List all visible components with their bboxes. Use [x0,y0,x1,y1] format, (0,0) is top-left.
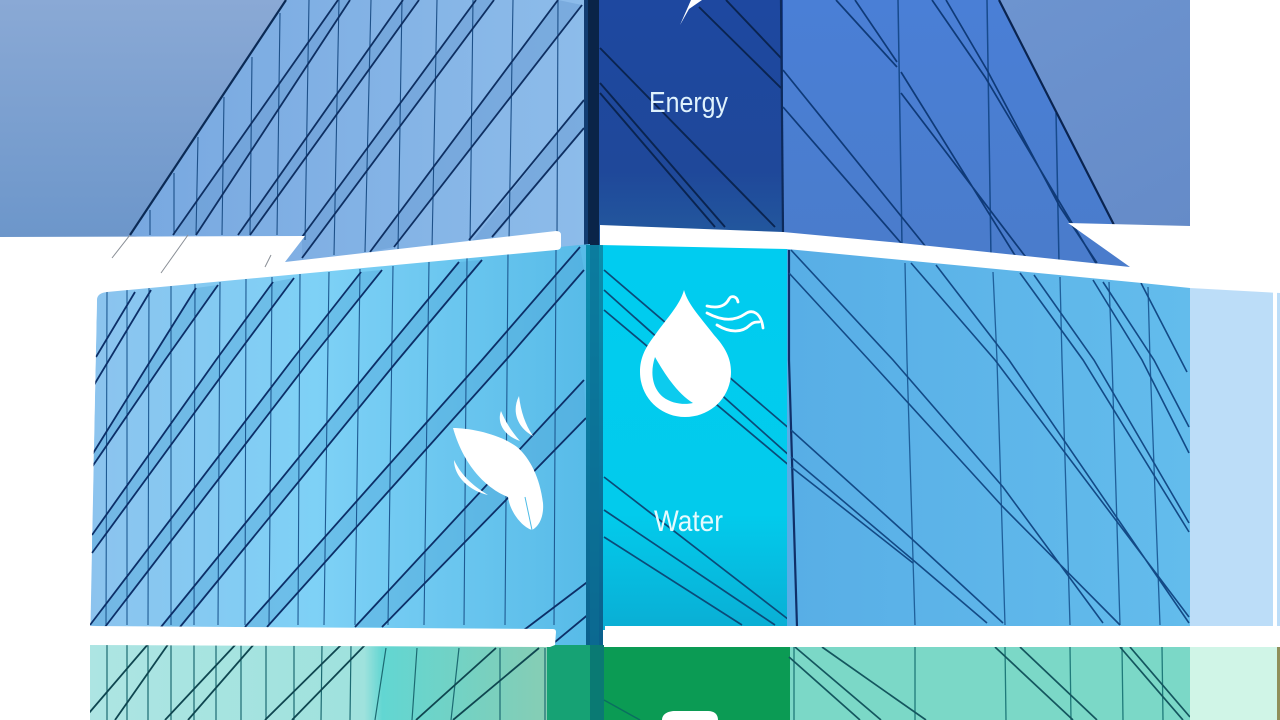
background: sky panel top right [780,0,1190,227]
facade lines: middle right verticals [905,263,1160,625]
facade lines: upper right diagonals [783,0,1097,265]
water drop highlight [652,357,693,404]
white band: upper right floor slab [600,0,1280,293]
central spine: lower [590,645,604,720]
icon: partial rounded shape in green column [662,711,718,720]
facade line: green column diagonal [604,700,640,720]
panel: upper facade right glass [781,0,1135,270]
panel: middle light side strip [1190,284,1280,629]
panel: lower light side strip [1190,647,1280,720]
panel: middle facade left glass [90,244,590,650]
central spine: middle [586,245,603,647]
white band: lower right floor slab [605,626,1280,647]
facade lines: lower left diagonals [89,643,539,720]
panel: lower facade right glass [789,647,1190,720]
leaf wind strokes [454,396,533,495]
facade bands: middle left tinted mullions [90,247,586,627]
central spine: upper [584,0,599,248]
icon: leaf with wind strokes [453,396,543,530]
panel: Energy dark blue column [598,0,783,245]
facade lines: lower left verticals [107,645,545,720]
icon: water drop with wind [640,290,763,417]
facade lines: lower right verticals [794,647,1163,720]
panel: lower facade left glass [89,643,592,720]
panel: Water cyan column [602,245,793,630]
facade lines: Water column diagonals [604,270,793,625]
white band: lower left floor slab [88,626,556,647]
faint stray lines on the white band [112,235,271,273]
facade lines: middle left diagonals [90,247,590,642]
label: Water: Water [654,505,723,538]
facade lines: middle right diagonals [789,250,1189,625]
building edge: upper right [999,0,1130,262]
panel: green column [604,647,790,720]
panel: middle facade right glass [787,248,1190,630]
facade lines: upper left diagonals [173,0,584,258]
leaf vein [525,497,532,530]
water drop [640,290,731,417]
facade lines: upper right verticals [781,0,783,232]
icon: lightning bolt tip [680,0,702,25]
facade lines: Energy column diagonals [600,0,781,227]
label: Energy: Energy [649,87,728,119]
building edge: upper left [130,0,286,235]
facade lines: lower right diagonals [789,647,1190,720]
background: sky panel top left [0,0,590,240]
facade lines: middle left verticals [106,250,556,625]
white band: upper left floor slab [0,231,561,720]
column edge: Water right [789,250,797,627]
panel: upper facade left glass [130,0,590,265]
leaf [453,428,543,530]
wind swirls [707,297,763,331]
facade bands: upper left tinted mullions [173,0,584,258]
facade lines: upper left verticals [150,0,558,255]
